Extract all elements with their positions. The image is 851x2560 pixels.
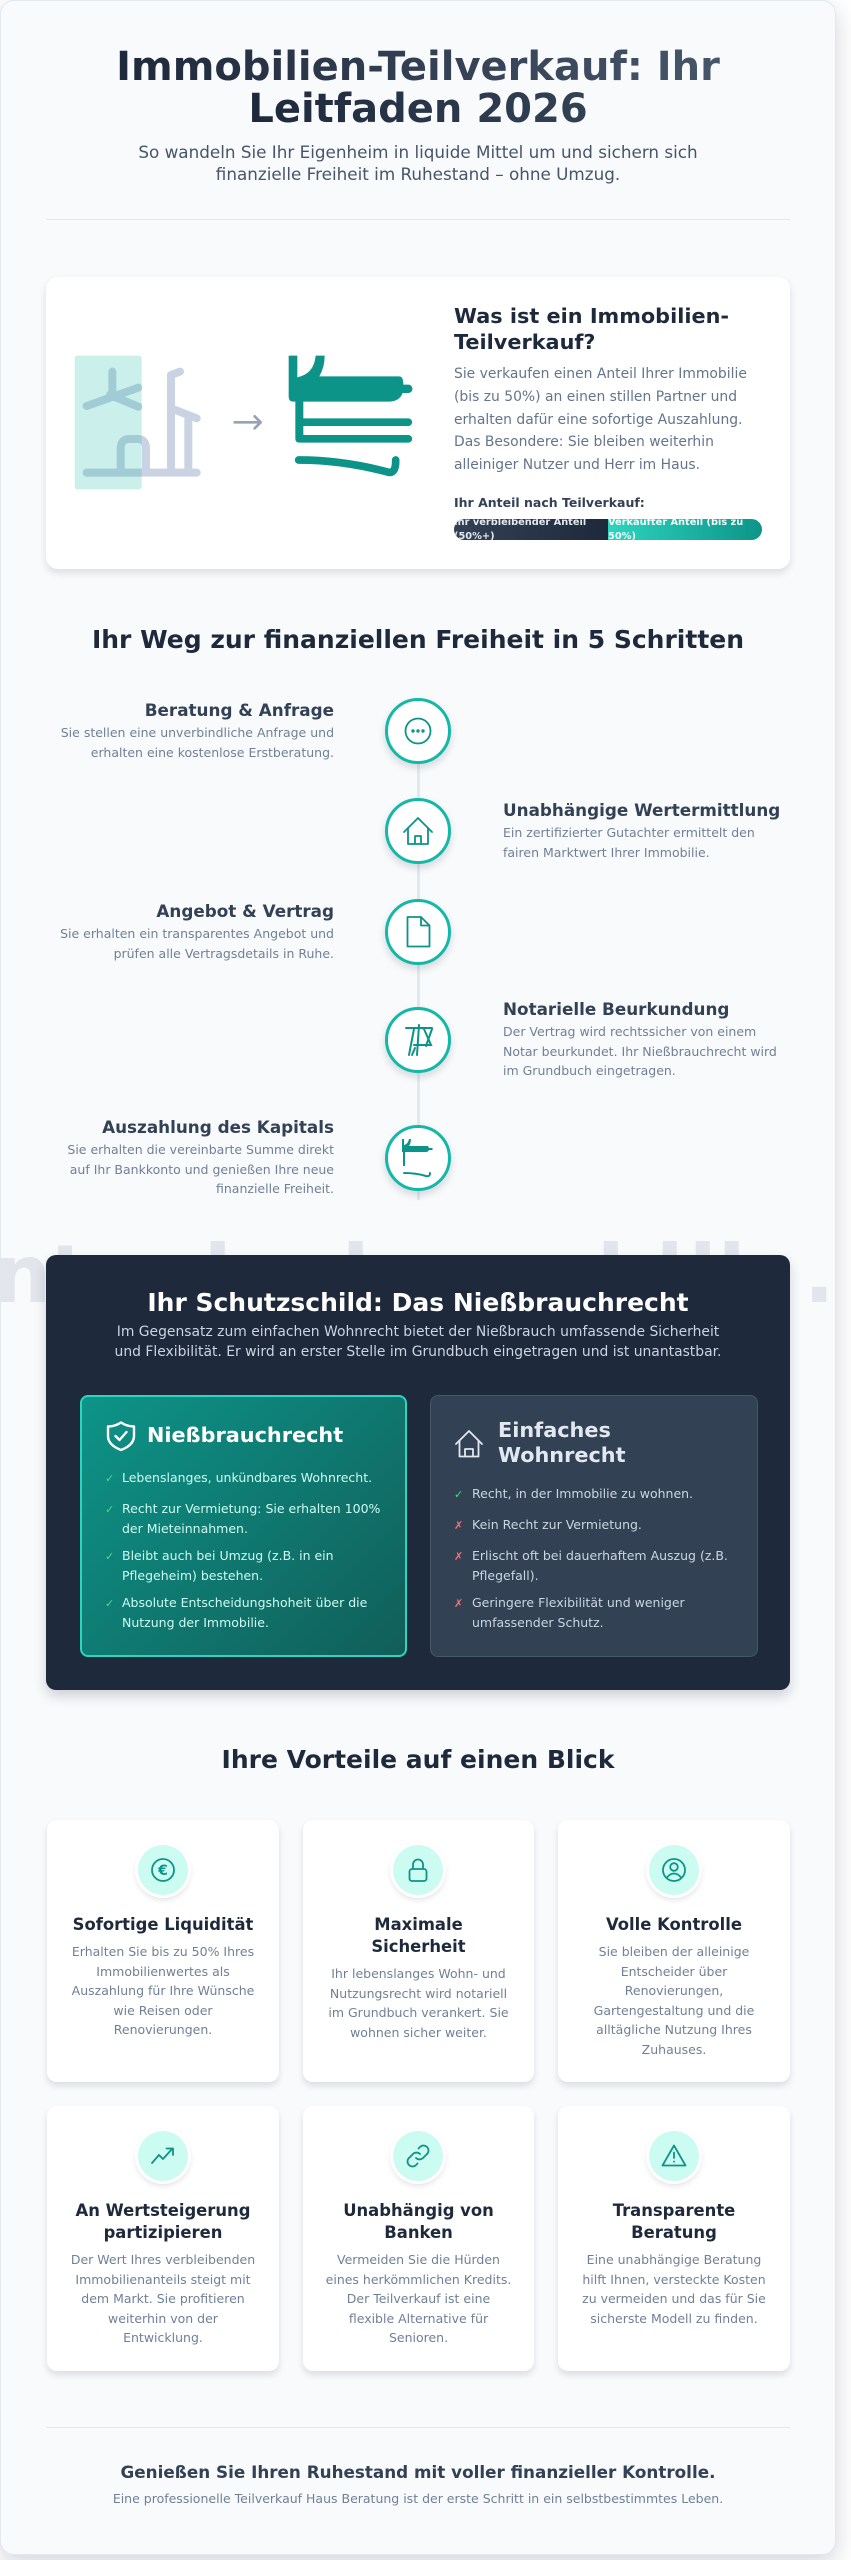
list item: Pflegefall). [472,1568,539,1582]
card title: partizipieren [104,2223,222,2242]
share bar label: Ihr Anteil nach Teilverkauf: [454,495,645,510]
step 4 text [503,999,777,1078]
card title: Volle Kontrolle [606,1915,742,1934]
icon: house outline [455,1430,483,1458]
icon: link [393,2131,443,2181]
card text: Entwicklung. [123,2330,203,2345]
card text [72,1944,254,2037]
card text: Der Teilverkauf ist eine [347,2291,490,2306]
footer heading: Genießen Sie Ihren Ruhestand mit voller finanzieller Kontrolle. [121,2462,715,2482]
watermark letters behind the panel [0,1230,834,1320]
benefit card: transparent advice [558,2106,790,2371]
panel: Einfaches Wohnrecht: ✗ [454,1597,463,1610]
step 4 icon [385,1007,451,1073]
intro text: erhalten dafür eine sofortige Auszahlung. [454,412,742,428]
card text: sicherste Modell zu finden. [590,2310,758,2326]
icon: euro [138,1845,188,1895]
intro heading: Was ist ein Immobilien- [454,304,729,328]
step 5 text [67,1117,334,1196]
intro text: alleiniger Nutzer und Herr im Haus. [454,457,700,473]
card text: Eine unabhängige Beratung [587,2252,761,2267]
card text: eines herkömmlichen Kredits. [326,2272,511,2286]
list item: Nutzung der Immobilie. [122,1614,269,1630]
card text: zu vermeiden und das für Sie [582,2291,766,2306]
title: Leitfaden 2026 [248,86,588,132]
title: Immobilien-Teilverkauf: Ihr [116,44,720,90]
list item: Geringere Flexibilität und weniger [472,1595,685,1610]
protection heading: Ihr Schutzschild: Das Nießbrauchrecht [147,1288,689,1317]
icon: user [649,1845,699,1895]
step 4 text: im Grundbuch eingetragen. [503,1063,676,1078]
panel: usufruct protection [46,1255,790,1690]
card text: Zuhauses. [642,2042,706,2056]
icon: warning triangle [649,2131,699,2181]
title [116,44,720,132]
card text: dem Markt. Sie profitieren [81,2291,245,2306]
share bar [454,519,762,540]
card title: Banken [384,2223,453,2242]
list item [454,1595,685,1630]
card text: Ihr lebenslanges Wohn- und [331,1966,506,1981]
list item [105,1595,367,1630]
card text: Sie bleiben der alleinige [599,1944,749,1959]
icon: shield check [106,1421,136,1452]
panel: Nießbrauchrecht: ✓ [105,1597,114,1610]
panel: Nießbrauchrecht: ✓ [105,1550,114,1563]
intro text [454,366,747,473]
card text [582,2252,766,2326]
card text: Renovierungen. [114,2022,212,2037]
intro text: Das Besondere: Sie bleiben weiterhin [454,434,714,450]
card title [612,2201,735,2242]
step 4 text: Der Vertrag wird rechtssicher von einem [503,1024,756,1039]
card title [371,1915,466,1956]
step 1 text: Sie stellen eine unverbindliche Anfrage und [61,725,334,740]
bar segment: remaining share [454,519,608,540]
card text [326,2252,511,2345]
step 2 icon [385,798,451,864]
card text: weiterhin von der [108,2310,218,2326]
protection text [115,1324,721,1360]
card title: Maximale [374,1915,463,1934]
list item: Kein Recht zur Vermietung. [472,1517,642,1532]
protection text: Im Gegensatz zum einfachen Wohnrecht bietet der Nießbrauch umfassende Sicherheit [117,1324,719,1340]
benefit card: appreciation [47,2106,279,2371]
step 5 text: finanzielle Freiheit. [216,1181,334,1196]
icon: lock [393,1845,443,1895]
card text: Entscheider über [621,1964,727,1978]
card text: im Grundbuch verankert. Sie [328,2005,509,2020]
protection text: und Flexibilität. Er wird an erster Stelle im Grundbuch eingetragen und ist unantastbar. [115,1344,721,1360]
card text: Immobilienwertes als [96,1964,230,1978]
step 3 text [60,901,334,960]
list item: Absolute Entscheidungshoheit über die [122,1595,367,1610]
list item: Bleibt auch bei Umzug (z.B. in ein [122,1548,334,1563]
subtitle [138,142,698,184]
step 3 icon [385,899,451,965]
step 3 text: Sie erhalten ein transparentes Angebot und [60,926,334,941]
card text: Renovierungen, [625,1983,723,1998]
step 3 text: Angebot & Vertrag [156,901,334,921]
benefit card: independent of banks [303,2106,534,2371]
card text: Vermeiden Sie die Hürden [337,2252,500,2267]
card text: wohnen sicher weiter. [350,2024,487,2040]
list item [105,1501,380,1536]
benefit card: control [558,1820,790,2082]
step 3 text: prüfen alle Vertragsdetails in Ruhe. [114,946,334,960]
bar segment: sold share [608,519,762,540]
card title [343,2201,494,2242]
card text: Senioren. [389,2330,448,2345]
panel: Einfaches Wohnrecht: ✗ [454,1519,463,1532]
card text: Gartengestaltung und die [594,2002,754,2018]
step 2 text [503,800,780,860]
card text: hilft Ihnen, versteckte Kosten [582,2272,766,2286]
card text: wie Reisen oder [113,2002,213,2018]
panel: Nießbrauchrecht [80,1395,407,1657]
card title: Sofortige Liquidität [73,1915,253,1934]
intro text: (bis zu 50%) an einen stillen Partner und [454,389,737,405]
list item: Pflegeheim) bestehen. [122,1568,263,1582]
card text: Erhalten Sie bis zu 50% Ihres [72,1944,254,1959]
step 2 text: Ein zertifizierter Gutachter ermittelt den [503,825,755,840]
card text: Der Wert Ihres verbleibenden [71,2252,255,2267]
icon: trend up [138,2131,188,2181]
step 5 text: Sie erhalten die vereinbarte Summe direkt [67,1142,334,1157]
card text: flexible Alternative für [349,2310,488,2326]
intro heading: Teilverkauf? [454,330,596,354]
panel: Nießbrauchrecht: ✓ [105,1503,114,1516]
step 1 text [61,700,334,760]
step 5 text: auf Ihr Bankkonto und genießen Ihre neue [70,1162,334,1176]
card text: alltägliche Nutzung Ihres [596,2022,752,2037]
panel heading [498,1418,626,1467]
panel: intro card [46,277,790,569]
intro heading [454,304,729,354]
step 1 icon [385,698,451,764]
subtitle: finanzielle Freiheit im Ruhestand – ohne Umzug. [216,164,620,184]
step 1 text: erhalten eine kostenlose Erstberatung. [91,744,334,760]
list item [454,1548,728,1582]
card text [594,1944,754,2056]
benefit card: liquidity [47,1820,279,2082]
panel heading: Wohnrecht [498,1443,626,1467]
panel: Einfaches Wohnrecht [430,1395,758,1657]
icon: euro: € [157,1863,168,1879]
panel: Nießbrauchrecht: ✓ [105,1472,114,1485]
panel heading: Nießbrauchrecht [147,1423,343,1447]
list item: der Mieteinnahmen. [122,1520,248,1536]
list item [105,1548,334,1582]
card text: Nutzungsrecht wird notariell [330,1986,507,2000]
card text [71,2252,255,2345]
list item: Erlischt oft bei dauerhaftem Auszug (z.B. [472,1548,728,1563]
subtitle: So wandeln Sie Ihr Eigenheim in liquide Mittel um und sichern sich [138,142,698,162]
step 2 text: fairen Marktwert Ihrer Immobilie. [503,844,710,860]
list item: Recht, in der Immobilie zu wohnen. [472,1486,693,1501]
card title: Beratung [631,2223,717,2242]
step 5 text: Auszahlung des Kapitals [102,1117,334,1137]
step 1 text: Beratung & Anfrage [145,700,334,720]
step 2 text: Unabhängige Wertermittlung [503,800,780,820]
list item: umfassender Schutz. [472,1614,604,1630]
card text: Auszahlung für Ihre Wünsche [72,1983,254,1998]
card title: Sicherheit [371,1937,466,1956]
footer text: Eine professionelle Teilverkauf Haus Beratung ist der erste Schritt in ein selbstbestimmtes Leben. [113,2491,723,2506]
panel: Einfaches Wohnrecht: ✗ [454,1550,463,1563]
card text [328,1966,509,2040]
panel heading: Einfaches [498,1418,611,1442]
intro text: Sie verkaufen einen Anteil Ihrer Immobilie [454,366,747,382]
step 5 icon [385,1125,451,1191]
step 4 text: Notarielle Beurkundung [503,999,729,1019]
benefit card: security [303,1820,534,2082]
card title [76,2201,250,2242]
illustration: house split into sold share [74,356,412,490]
list item: Recht zur Vermietung: Sie erhalten 100% [122,1501,380,1516]
section heading: steps: Ihr Weg zur finanziellen Freiheit in 5 Schritten [92,625,744,654]
card text: Immobilienanteils steigt mit [75,2272,251,2286]
section heading: benefits: Ihre Vorteile auf einen Blick [222,1745,614,1774]
panel: Einfaches Wohnrecht: ✓ [454,1488,463,1501]
card title: Transparente [613,2201,735,2220]
list item: Lebenslanges, unkündbares Wohnrecht. [122,1470,372,1485]
card title: An Wertsteigerung [76,2201,250,2220]
step 4 text: Notar beurkundet. Ihr Nießbrauchrecht wird [503,1044,777,1058]
card title: Unabhängig von [343,2201,494,2220]
